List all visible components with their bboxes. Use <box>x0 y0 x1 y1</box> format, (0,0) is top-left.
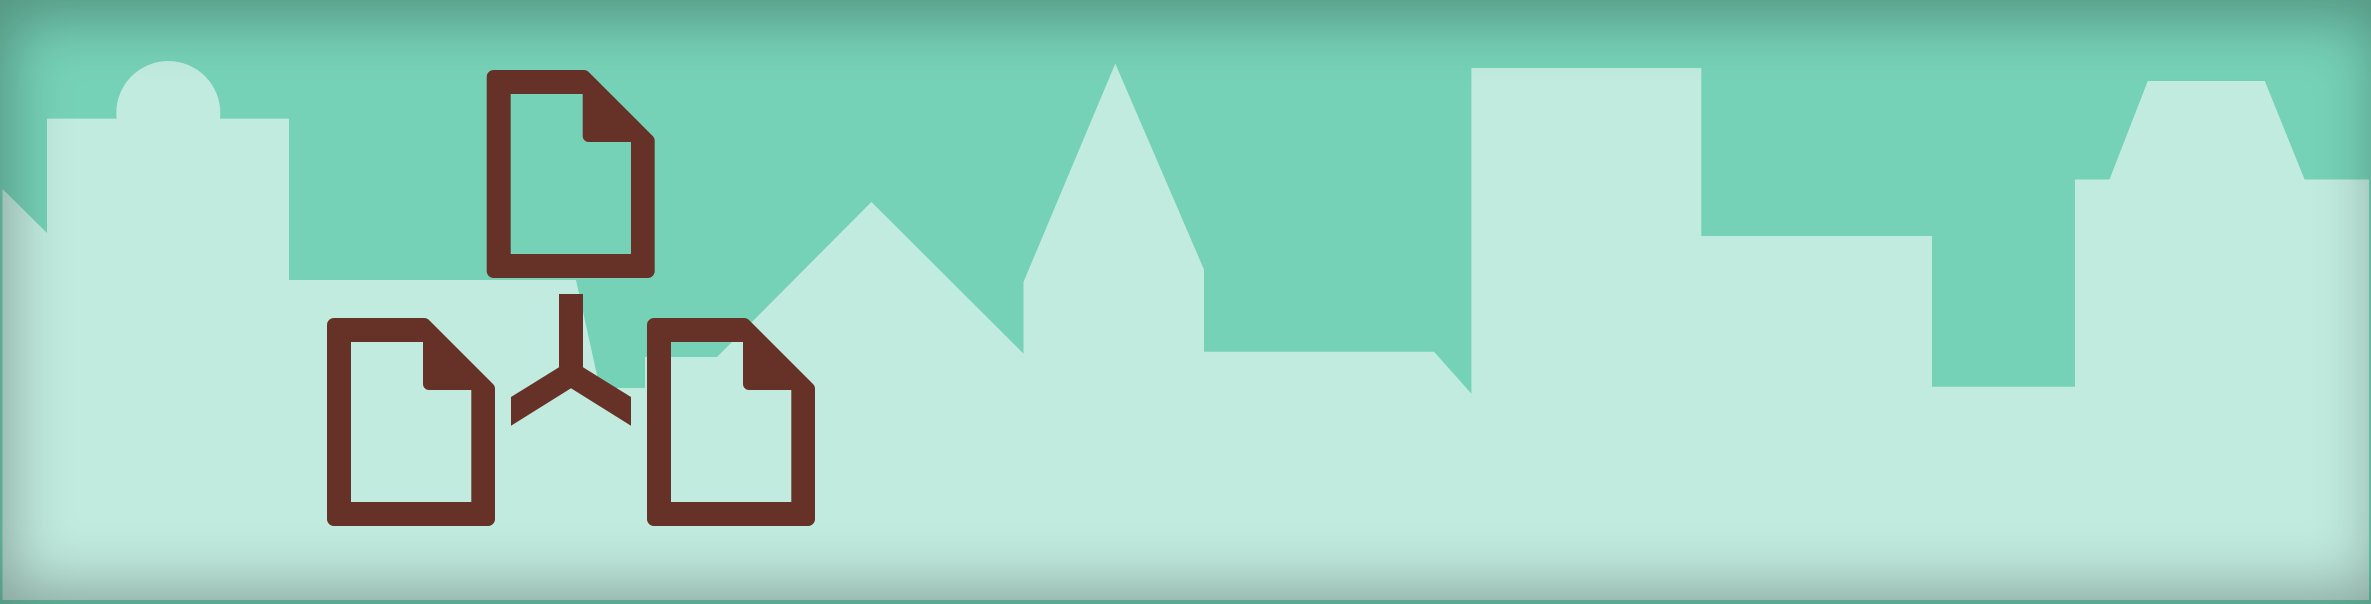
icon: document split into two <box>327 70 815 526</box>
icon: source document <box>487 70 655 278</box>
icon: left output document <box>327 318 495 526</box>
icon: split arrow <box>511 294 631 426</box>
icon: right output document <box>647 318 815 526</box>
